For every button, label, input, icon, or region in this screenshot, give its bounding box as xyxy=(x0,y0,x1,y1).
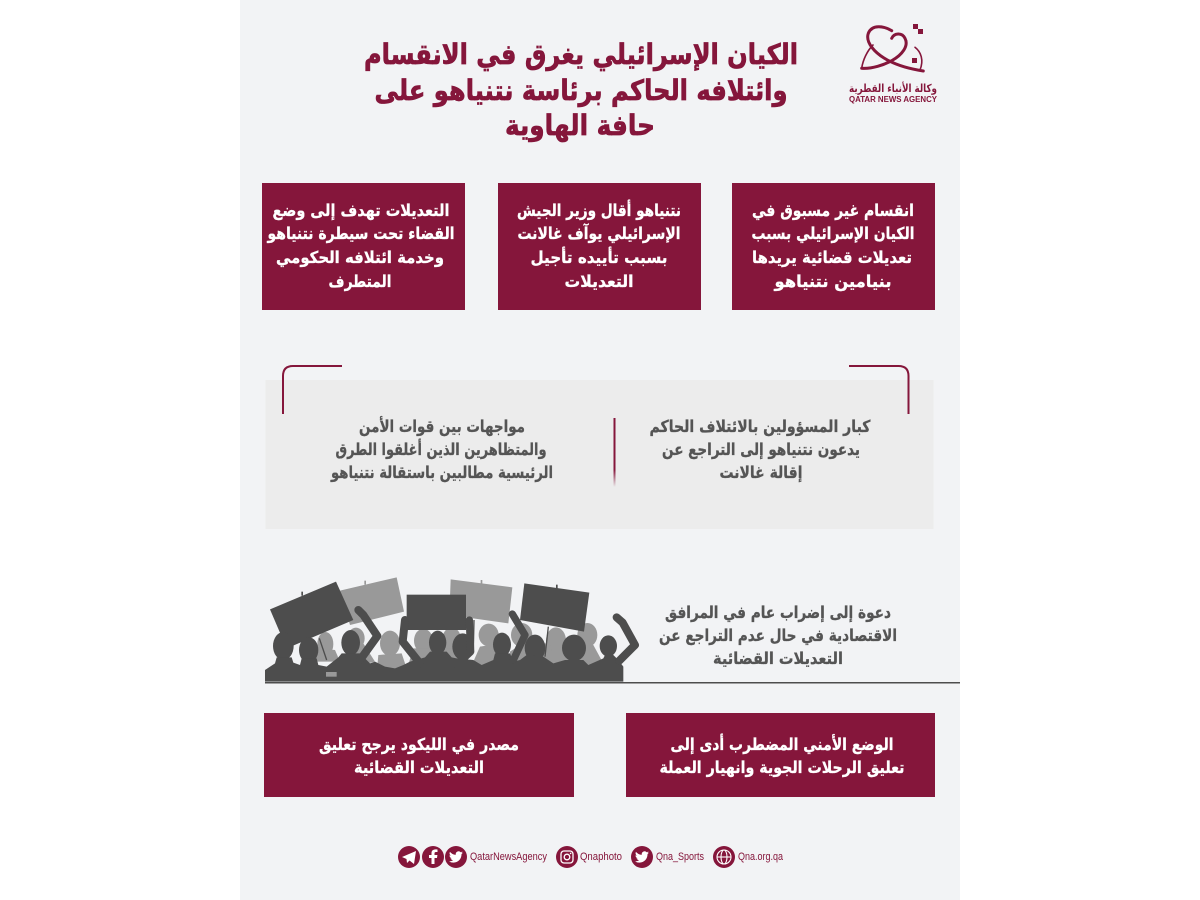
text: general strike call: دعوة إلى إضراب عام في المرافق xyxy=(665,603,891,623)
icon: instagram xyxy=(556,846,578,868)
handle: Qna_Sports: Qna_Sports xyxy=(656,851,704,863)
card: defence minister dismissed xyxy=(498,183,701,310)
card: Likud source: مصدر في الليكود يرجح تعليق xyxy=(319,735,519,755)
text: senior coalition officials: إقالة غالانت xyxy=(720,463,802,482)
title: حافة الهاوية xyxy=(505,109,655,142)
card: defence minister dismissed: الإسرائيلي يوآف غالانت xyxy=(518,222,680,244)
logo: Qatar News Agency xyxy=(849,24,938,104)
icon: globe xyxy=(713,846,735,868)
text: confrontations: الرئيسية مطالبين باستقالة نتنياهو xyxy=(330,463,553,483)
card: security situation xyxy=(626,713,935,797)
card: unprecedented division: بنيامين نتنياهو xyxy=(774,272,892,292)
icon: facebook xyxy=(422,846,444,868)
text: general strike call: التعديلات القضائية xyxy=(713,649,843,668)
icon: telegram xyxy=(398,846,420,868)
illustration: protesters with placards xyxy=(265,577,635,682)
card: judiciary control: التعديلات تهدف إلى وضع xyxy=(272,201,450,221)
text: general strike call xyxy=(659,603,897,668)
card: defence minister dismissed: نتنياهو أقال وزير الجيش xyxy=(517,200,681,221)
card: defence minister dismissed: بسبب تأييده تأجيل xyxy=(530,247,668,267)
footer: social links xyxy=(398,846,784,868)
page background xyxy=(240,0,960,900)
card: Likud source: التعديلات القضائية xyxy=(354,758,484,777)
card: unprecedented division: انقسام غير مسبوق في xyxy=(752,201,914,221)
handle: Qnaphoto: Qnaphoto xyxy=(580,851,622,863)
title: وائتلافه الحاكم برئاسة نتنياهو على xyxy=(374,74,788,107)
ground line xyxy=(265,682,960,684)
title xyxy=(364,38,798,142)
title: الكيان الإسرائيلي يغرق في الانقسام xyxy=(364,38,798,71)
card: unprecedented division: تعديلات قضائية يريدها xyxy=(752,248,912,268)
logo: Qatar News Agency: QATAR NEWS AGENCY xyxy=(849,95,938,104)
card: defence minister dismissed: التعديلات xyxy=(564,272,634,291)
text: confrontations: مواجهات بين قوات الأمن xyxy=(359,416,525,437)
handle: QatarNewsAgency: QatarNewsAgency xyxy=(470,851,547,863)
text: senior coalition officials xyxy=(650,417,871,482)
card: unprecedented division xyxy=(732,183,935,310)
icon: twitter xyxy=(445,846,467,868)
card: security situation: تعليق الرحلات الجوية وانهيار العملة xyxy=(660,758,904,778)
card: security situation: الوضع الأمني المضطرب أدى إلى xyxy=(670,734,894,755)
card: unprecedented division: الكيان الإسرائيلي بسبب xyxy=(752,224,914,244)
panel: coalition calls and confrontations xyxy=(266,366,934,529)
card: judiciary control: القضاء تحت سيطرة نتنياهو xyxy=(267,224,454,244)
handle: Qna.org.qa: Qna.org.qa xyxy=(738,851,784,863)
card: Likud source xyxy=(264,713,574,797)
text: confrontations xyxy=(330,416,553,483)
text: senior coalition officials: يدعون نتنياهو إلى التراجع عن xyxy=(662,440,860,460)
card: judiciary control: وخدمة ائتلافه الحكومي xyxy=(276,248,444,268)
text: confrontations: والمتظاهرين الذين أغلقوا الطرق xyxy=(336,439,546,460)
text: senior coalition officials: كبار المسؤولين بالائتلاف الحاكم xyxy=(650,417,871,437)
card: judiciary control: المتطرف xyxy=(328,272,392,292)
card: judiciary control xyxy=(262,183,465,310)
icon: twitter sports xyxy=(631,846,653,868)
logo: Qatar News Agency: وكالة الأنباء القطرية xyxy=(849,81,937,95)
text: general strike call: الاقتصادية في حال عدم التراجع عن xyxy=(659,626,897,646)
